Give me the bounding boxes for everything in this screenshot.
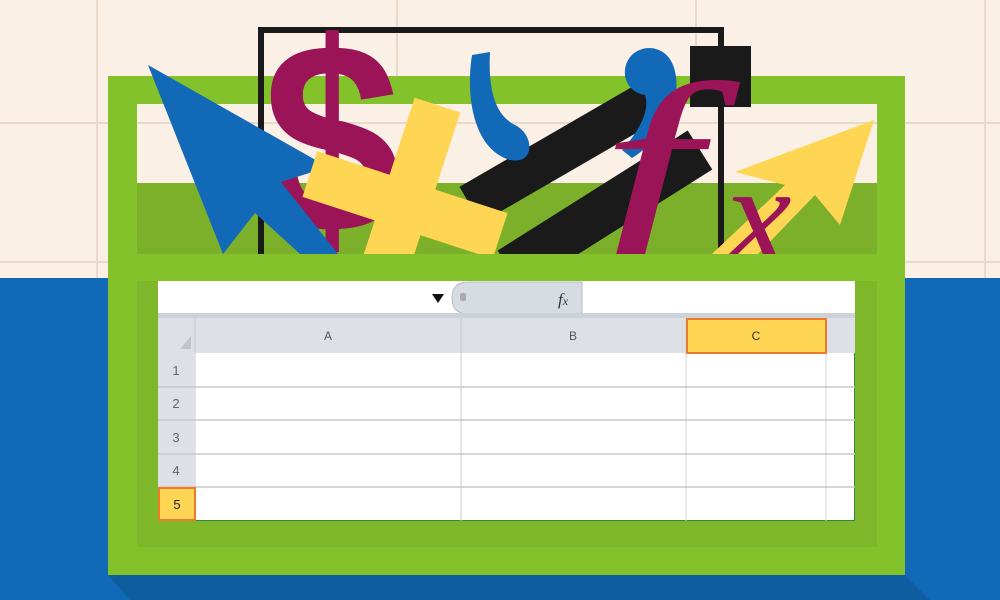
blue arrow cursor (148, 65, 338, 254)
black frame (261, 30, 721, 270)
rows (158, 353, 855, 521)
column headers: A (324, 329, 332, 343)
box back (108, 76, 905, 575)
rows: 4 (172, 463, 180, 478)
yellow arrow (712, 120, 874, 254)
rows: 2 (172, 396, 180, 411)
yellow plus (302, 98, 508, 254)
column headers (158, 318, 855, 521)
rows: 3 (172, 430, 180, 445)
fx: f (600, 35, 745, 303)
box front (137, 254, 877, 547)
rows: 1 (172, 363, 180, 378)
tools in box (148, 27, 874, 254)
black bars (470, 95, 660, 205)
formula bar: fx (558, 290, 569, 309)
spreadsheet (158, 281, 855, 521)
column headers: C (752, 329, 761, 343)
rows: 5 (173, 497, 181, 512)
toolbox (108, 27, 905, 575)
formula bar (158, 281, 855, 318)
blue quotes (470, 52, 529, 161)
tools in box: x (723, 133, 792, 299)
column headers: B (569, 329, 577, 343)
